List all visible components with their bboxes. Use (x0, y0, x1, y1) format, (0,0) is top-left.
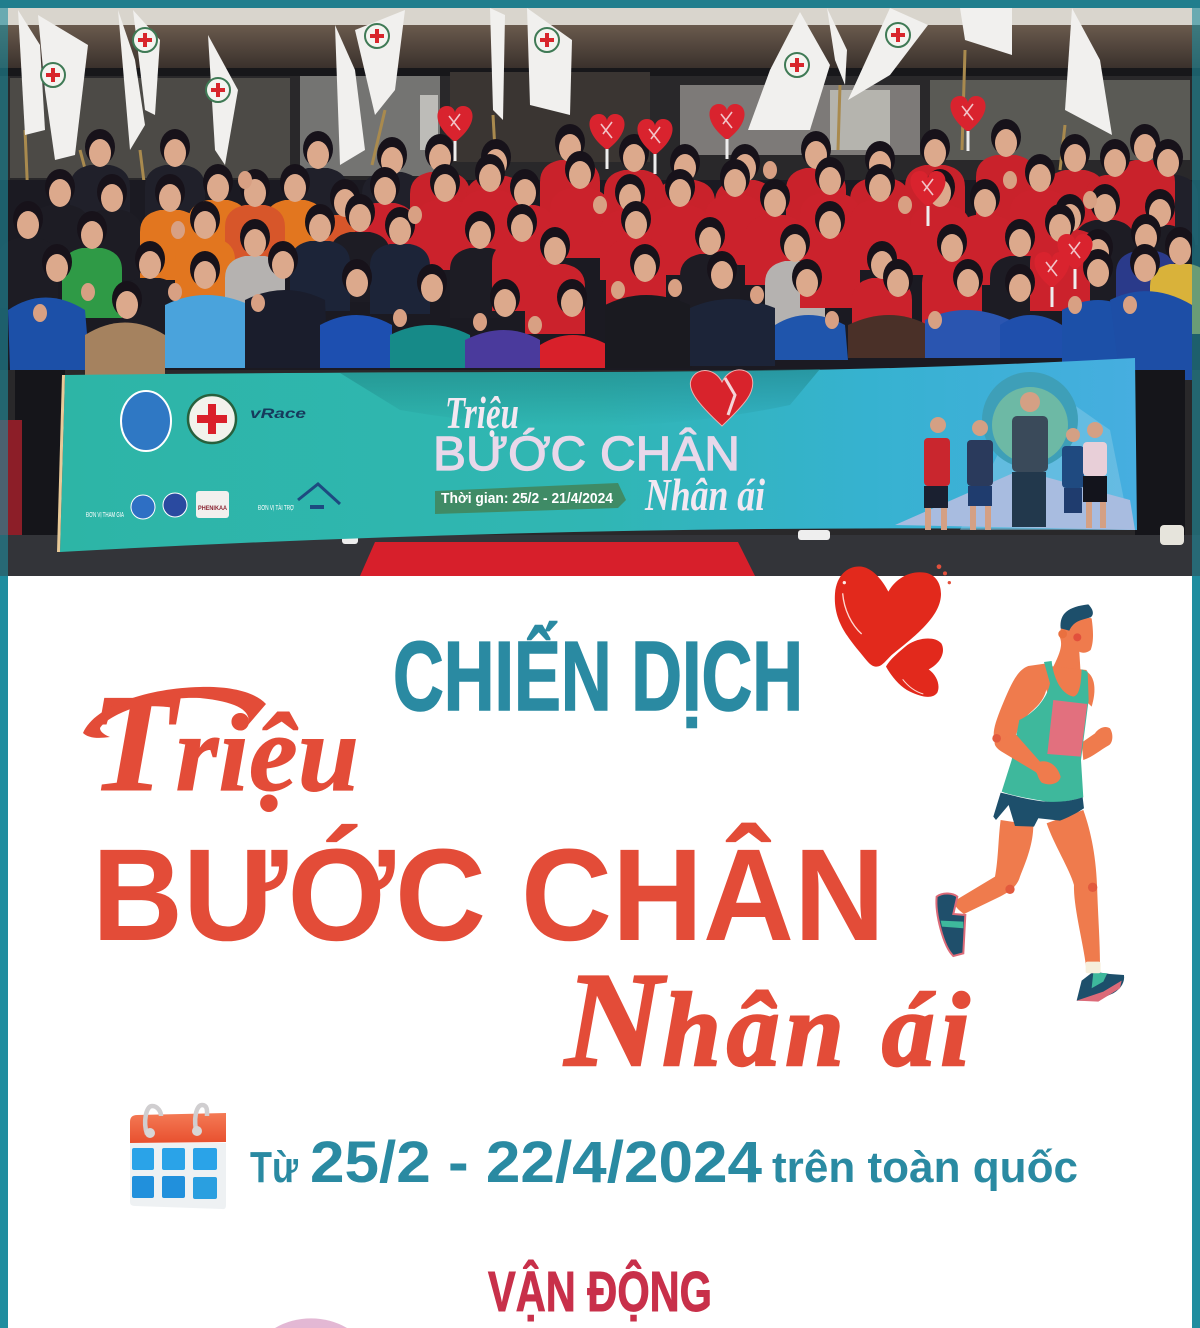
building facade (0, 0, 1200, 576)
campaign banner (57, 358, 1137, 552)
crowd third row (0, 194, 1200, 348)
icon: red hearts (835, 564, 951, 697)
date line: Từ (250, 1143, 298, 1192)
runner: leading leg (1047, 810, 1100, 966)
runner: far arm (1082, 727, 1112, 760)
runner: race bib (1047, 700, 1087, 757)
ground and red carpet (0, 525, 1200, 576)
white content panel (8, 576, 1192, 1328)
runner: singlet (1002, 661, 1089, 802)
crowd front row: jackets (0, 290, 1192, 555)
banner heart (690, 370, 753, 426)
runner: trailing leg (953, 820, 1033, 914)
title: BƯỚC CHÂN: BƯỚC CHÂN (92, 821, 885, 968)
date line: trên toàn quốc (772, 1143, 1078, 1192)
photo: campaign launch group portrait (0, 0, 1200, 576)
banner logos (86, 391, 340, 519)
white Red Cross flags (18, 8, 1112, 165)
banner title: Thời gian: 25/2 - 21/4/2024 (441, 491, 613, 507)
banner title (433, 387, 765, 520)
icon: calendar (130, 1105, 226, 1209)
red heart hand signs (437, 96, 1093, 307)
crowd front row: faces (42, 241, 1160, 319)
crowd middle row (30, 151, 1190, 300)
date line (250, 1130, 1078, 1195)
heading: VẬN ĐỘNG: VẬN ĐỘNG (488, 1259, 712, 1324)
pink circle top (275, 1318, 347, 1328)
script title: Triệu: Triệu (90, 666, 359, 821)
raised fists (33, 161, 1137, 334)
runner: near forearm (995, 733, 1061, 784)
runner: shorts (993, 793, 1084, 827)
script title: Nhân ái: Nhân ái (563, 946, 976, 1095)
banner title: Nhân ái (644, 469, 765, 520)
runner: neck and head (1053, 618, 1093, 673)
crowd back row (0, 119, 1200, 370)
banner runners (895, 372, 1135, 530)
runner: front shoe (1077, 972, 1124, 1001)
runner: chest and shoulders (1040, 665, 1090, 703)
flag poles (25, 50, 1065, 200)
banner logos: ĐƠN VỊ TÀI TRỢ (258, 503, 294, 512)
banner title: Triệu (445, 387, 519, 438)
date line: 25/2 - 22/4/2024 (310, 1130, 762, 1195)
banner logos: PHENIKAA (198, 506, 228, 512)
illustration: runner (936, 604, 1124, 1002)
runner: rear shoe (936, 893, 965, 956)
heading: CHIẾN DỊCH: CHIẾN DỊCH (393, 621, 803, 731)
banner title: BƯỚC CHÂN (433, 427, 740, 481)
banner logos: ĐƠN VỊ THAM GIA (86, 512, 124, 519)
banner logos: vRace (250, 405, 306, 421)
